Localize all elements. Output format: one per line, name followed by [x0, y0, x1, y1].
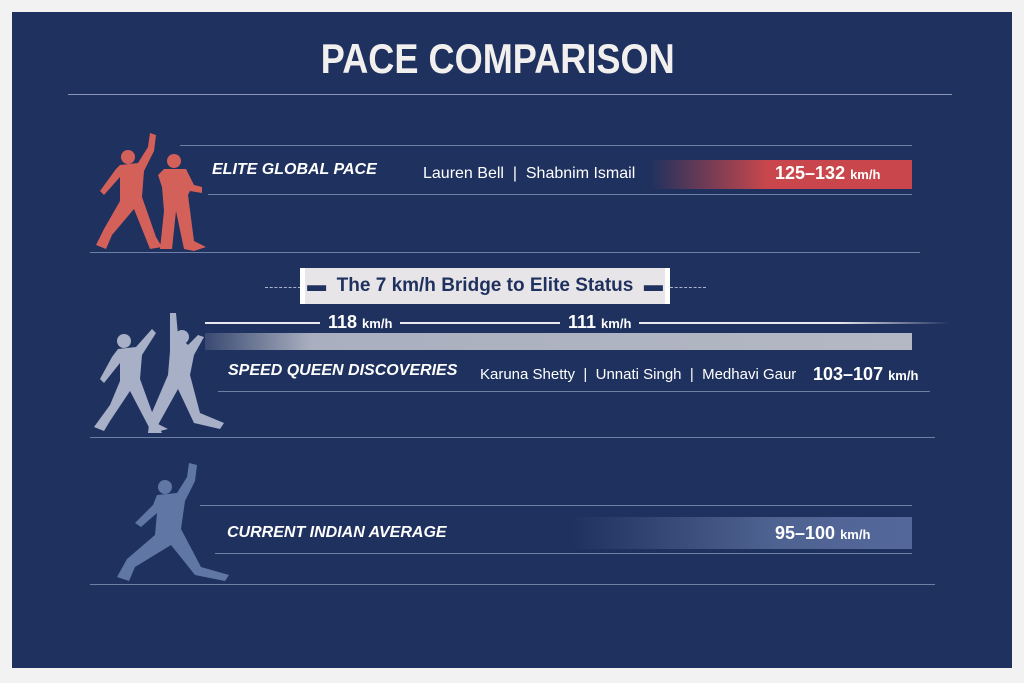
speed markers: 111 km/h	[568, 312, 631, 332]
icon: indian average bowler	[117, 463, 229, 581]
row: current indian average: 95–100 km/h	[775, 523, 870, 543]
bar: indian average	[570, 517, 912, 549]
row: speed queen discoveries	[90, 362, 935, 438]
row: speed queen discoveries: Karuna Shetty | Unnati Singh | Medhavi Gaur	[480, 366, 796, 383]
row: elite global pace: ELITE GLOBAL PACE	[212, 161, 377, 178]
row: elite global pace: 125–132 km/h	[775, 163, 880, 183]
icon: speed queen bowlers	[94, 313, 224, 433]
row: speed queen discoveries: 103–107 km/h	[813, 364, 918, 384]
icon: elite bowlers	[96, 133, 206, 251]
callout: bridge: ▬ The 7 km/h Bridge to Elite Status ▬	[307, 275, 663, 296]
row: current indian average	[90, 505, 935, 585]
speed markers	[205, 312, 946, 332]
row: speed queen discoveries: SPEED QUEEN DISCOVERIES	[228, 362, 457, 379]
speed markers: 118 km/h	[328, 312, 392, 332]
bar: elite	[650, 160, 912, 189]
bar: speed queen	[205, 333, 912, 350]
row: elite global pace: Lauren Bell | Shabnim Ismail	[423, 165, 635, 182]
title: PACE COMPARISON	[321, 35, 675, 82]
row: current indian average: CURRENT INDIAN AVERAGE	[227, 524, 447, 541]
row: elite global pace	[90, 145, 920, 253]
